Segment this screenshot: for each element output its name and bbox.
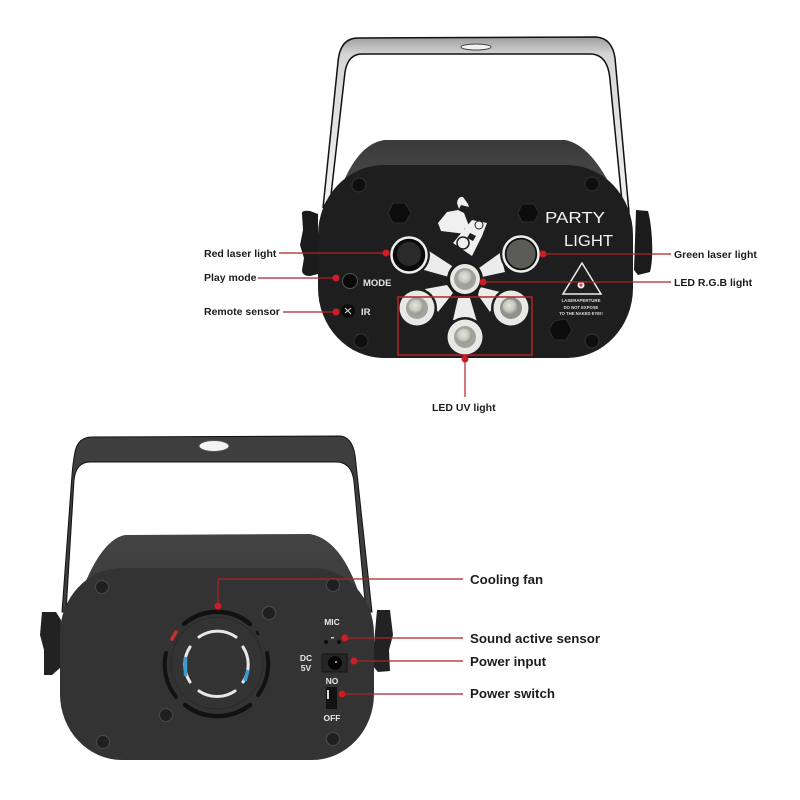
power jack (322, 654, 347, 672)
left knob, rear (40, 612, 61, 675)
callout: LED UV light: LED UV light (432, 402, 496, 414)
NO label: NO (326, 676, 339, 686)
DC 5V label: DC (300, 653, 312, 663)
callout: power switch: Power switch (470, 686, 555, 701)
callout: play mode: Play mode (204, 272, 257, 284)
rear panel (60, 568, 374, 760)
green laser lens (500, 233, 542, 275)
front panel (318, 165, 633, 358)
LED UV lens left (397, 288, 437, 328)
screws, rear (96, 578, 340, 748)
callout: play mode (204, 272, 340, 284)
laser warning sign: TO THE NAKED EYE!! (559, 311, 603, 316)
OFF label: OFF (324, 713, 340, 723)
callout: red laser light: Red laser light (204, 248, 277, 260)
laser warning sign (559, 263, 603, 316)
icon: DJ figure (438, 197, 487, 256)
callout: power input (350, 654, 547, 669)
IR sensor (341, 304, 371, 318)
callout: LED UV light (432, 356, 496, 414)
LED UV lens right (491, 288, 531, 328)
callout: power input: Power input (470, 654, 547, 669)
hex plugs, front (388, 203, 572, 340)
mode button (342, 274, 392, 289)
callout: cooling fan (214, 572, 543, 610)
callout: sound active sensor: Sound active sensor (470, 631, 600, 646)
screws, front (352, 177, 599, 348)
callout: LED RGB light (480, 277, 753, 289)
callout: remote sensor: Remote sensor (204, 306, 280, 318)
LED RGB lens (447, 261, 483, 297)
red laser lens (388, 234, 430, 276)
callout: power switch (338, 686, 555, 701)
laser warning sign: LASERAPERTURE (561, 298, 601, 303)
front view of party light (300, 37, 652, 358)
callout: green laser light (540, 249, 757, 261)
callout: remote sensor (204, 306, 340, 318)
housing top, front (340, 140, 615, 240)
mounting bracket, front (323, 37, 629, 212)
callout: green laser light: Green laser light (674, 249, 757, 261)
left knob, front (300, 211, 318, 276)
brand text: party light: PARTY (545, 210, 605, 227)
right knob, front (634, 210, 652, 275)
bracket hole (199, 440, 229, 452)
LED UV lens bottom (445, 317, 485, 357)
brand text: party light (545, 210, 613, 250)
right knob, rear (372, 610, 393, 672)
white fan wedges (424, 251, 505, 322)
mic holes (324, 637, 341, 644)
MIC label: MIC (324, 617, 340, 627)
IR sensor: IR (361, 307, 371, 318)
power switch (326, 687, 337, 709)
rear view of party light (40, 436, 393, 760)
callout: sound active sensor (342, 631, 600, 646)
DC 5V label: 5V (301, 663, 312, 673)
housing top, rear (75, 534, 364, 610)
brand text: party light: LIGHT (564, 233, 613, 250)
mode button: MODE (363, 278, 392, 289)
DC 5V label (300, 653, 312, 673)
callout: LED RGB light: LED R.G.B light (674, 277, 753, 289)
callout: cooling fan: Cooling fan (470, 572, 543, 587)
red box around LED UV lights (398, 297, 532, 355)
cooling fan grille (165, 612, 268, 716)
mounting bracket, rear (62, 436, 372, 612)
callout: red laser light (204, 248, 390, 260)
laser warning sign: DO NOT EXPOSE (564, 305, 599, 310)
